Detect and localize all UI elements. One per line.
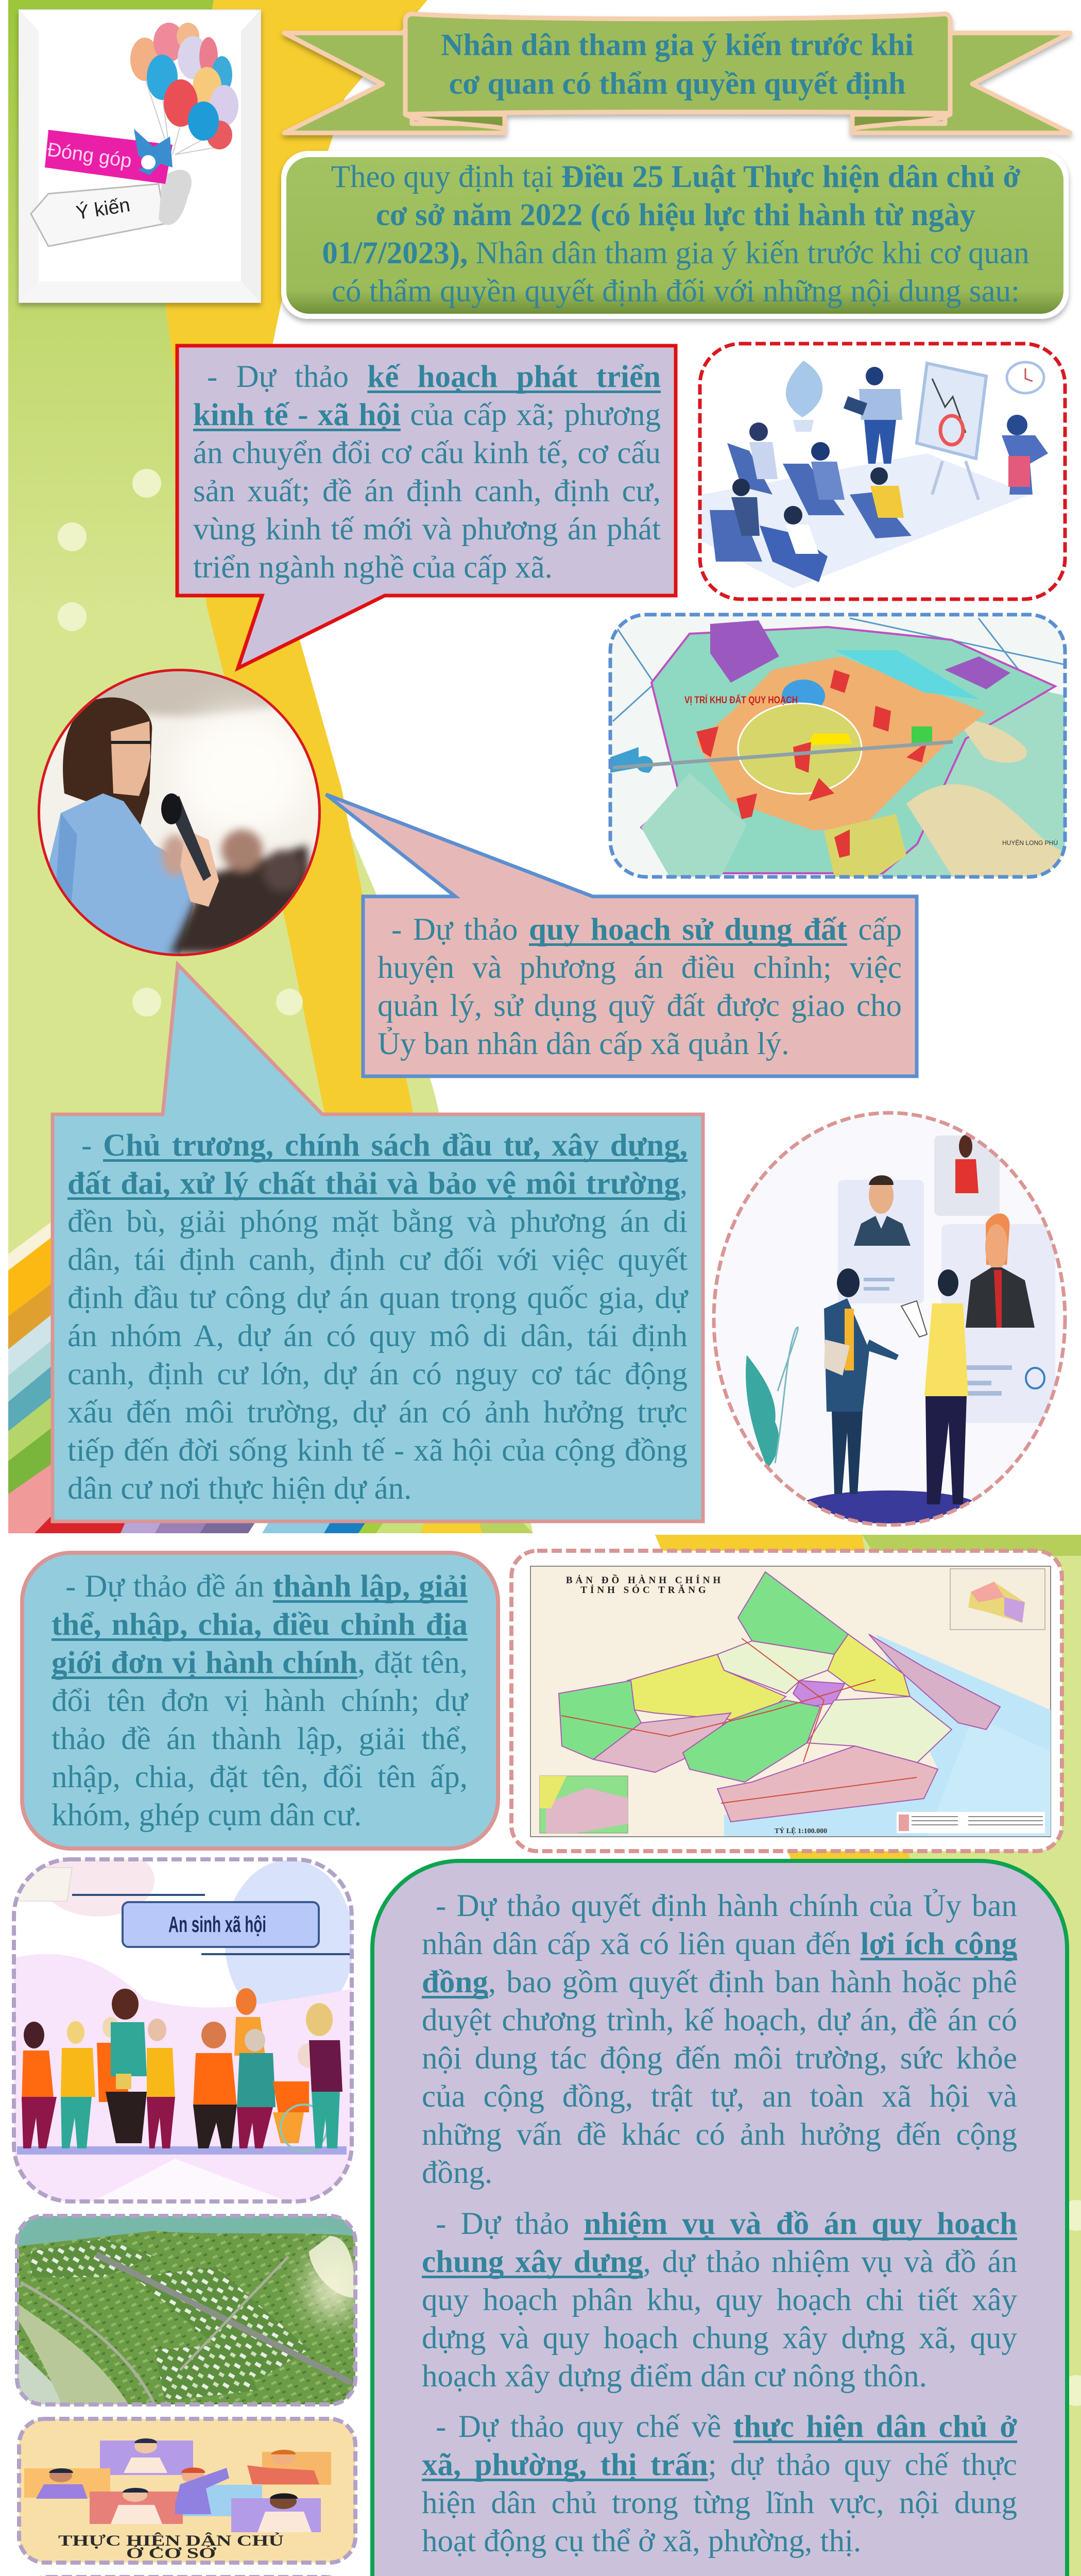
text: investment policy item: án nhóm A, dự án có quy mô di dân, tái định — [67, 1319, 688, 1353]
image: Soc Trang administrative map: TỶ LỆ 1:100.000 — [775, 1826, 827, 1835]
text: community decisions item: những vấn đề khác có ảnh hưởng đến cộng — [422, 2117, 1017, 2152]
image border: red dashed — [700, 344, 1065, 599]
text: economic plan item — [193, 360, 661, 585]
background: top section shapes — [0, 0, 533, 1535]
title text: Nhân dân tham gia ý kiến trước khi — [441, 28, 914, 62]
text: administrative unit item: khóm, ghép cụm dân cư. — [52, 1798, 362, 1833]
person: woman with folder — [824, 1268, 899, 1494]
map legend — [897, 1812, 1045, 1833]
poster title: THỰC HIỆN DÂN CHỦ — [58, 2532, 284, 2549]
title text — [441, 28, 914, 100]
image border: lavender dashed — [14, 1859, 352, 2201]
text: administrative unit item: - Dự thảo đề án thành lập, giải — [65, 1569, 468, 1604]
image: social security group illustration — [14, 1844, 354, 2201]
plant — [746, 1327, 798, 1468]
intro panel background — [281, 151, 1069, 319]
text: construction planning item: quy hoạch phân khu, quy hoạch chi tiết xây — [422, 2283, 1017, 2317]
intro text: cơ sở năm 2022 (có hiệu lực thi hành từ ngày — [376, 198, 975, 232]
profile card: man — [838, 1175, 924, 1303]
text: community decisions item: - Dự thảo quyết định hành chính của Ủy ban — [436, 1889, 1017, 1923]
poster title: Ở CƠ SỞ — [126, 2546, 217, 2562]
icon: potted plant — [786, 361, 822, 432]
text: community decisions item: duyệt chương trình, kế hoạch, dự án, đề án có — [422, 2003, 1017, 2038]
text: administrative unit item: thảo đề án thành lập, giải thể, — [52, 1722, 468, 1756]
icon: white scroll with label — [31, 170, 192, 246]
image: town planning map: HUYỆN LONG PHÚ — [1002, 839, 1058, 846]
image: Soc Trang administrative map — [511, 1551, 1062, 1851]
text: administrative unit item: giới đơn vị hành chính, đặt tên, — [52, 1646, 468, 1680]
text: administrative unit item — [52, 1569, 469, 1833]
title text: cơ quan có thẩm quyền quyết định — [449, 66, 905, 100]
poster title — [58, 2532, 284, 2562]
image: town planning map: VỊ TRÍ KHU ĐẤT QUY HOẠCH — [684, 694, 798, 706]
panel: pink speech bubble — [326, 794, 917, 1076]
text: construction planning item — [422, 2205, 1017, 2396]
text: community decisions item — [422, 1887, 1017, 2192]
profile card: man in suit — [941, 1213, 1055, 1423]
label box: An sinh xã hội — [168, 1912, 266, 1937]
text: democracy regulation item — [422, 2408, 1017, 2561]
text: investment policy item: canh, định cư lớn, dự án có nguy cơ tác động — [67, 1357, 688, 1392]
text: democracy regulation item: xã, phường, thị trấn; dự thảo quy chế thực — [422, 2448, 1017, 2482]
text: construction planning item: chung xây dựng, dự thảo nhiệm vụ và đồ án — [422, 2245, 1017, 2279]
text: land use item: quản lý, sử dụng quỹ đất được giao cho — [378, 989, 902, 1023]
person: presenting woman — [1002, 415, 1048, 495]
map title: BẢN ĐỒ HÀNH CHÍNH — [566, 1574, 724, 1586]
image: town planning map — [610, 615, 1065, 877]
image border: blue dashed — [610, 615, 1065, 877]
image border: lavender dashed — [17, 2216, 355, 2404]
panel: balloon card — [19, 10, 261, 302]
text: investment policy item: - Chủ trương, chính sách đầu tư, xây dựng, — [81, 1128, 688, 1163]
text: economic plan item: kinh tế - xã hội của cấp xã; phương — [193, 398, 661, 432]
text: community decisions item: nội dung tác động đến môi trường, sức khỏe — [422, 2041, 1017, 2076]
image: woman speaking at microphone — [40, 665, 318, 954]
text: investment policy item: định đầu tư công dự án quan trọng quốc gia, dự — [67, 1281, 688, 1315]
text: economic plan item: vùng kinh tế mới và phương án phát — [193, 512, 661, 547]
image: team meeting illustration — [701, 361, 1048, 588]
text: administrative unit item: đổi tên đơn vị hành chính; dự — [52, 1684, 468, 1718]
text: investment policy item: dân, tái định canh, định cư đối với việc quyết — [67, 1243, 688, 1277]
panel: red speech bubble — [177, 346, 676, 668]
provinces — [559, 1572, 1000, 1822]
intro text: có thẩm quyền quyết định đối với những nội dung sau: — [332, 274, 1020, 309]
text: construction planning item: hoạch xây dựng điểm dân cư nông thôn. — [422, 2359, 927, 2394]
text: land use item: - Dự thảo quy hoạch sử dụng đất cấp — [391, 912, 902, 947]
image border: rose dashed ellipse — [714, 1113, 1065, 1525]
person: man in yellow shirt — [901, 1269, 968, 1504]
text: democracy regulation item: - Dự thảo quy chế về thực hiện dân chủ ở — [436, 2410, 1017, 2444]
icon: white scroll with label: Ý kiến — [75, 194, 132, 224]
text: investment policy item: xấu đến môi trường, dự án có ảnh hưởng trực — [67, 1395, 688, 1430]
text: land use item: huyện và phương án điều chỉnh; việc — [378, 951, 902, 985]
icon: pink ribbon with label: Đóng góp — [46, 139, 133, 172]
text: community decisions item: nhân dân cấp xã có liên quan đến lợi ích cộng — [422, 1927, 1017, 1961]
icon: presentation board — [917, 363, 986, 500]
image: grassroots democracy illustration — [19, 2419, 355, 2563]
text: economic plan item: - Dự thảo kế hoạch phát triển — [207, 360, 661, 394]
ribbon banner — [284, 14, 1070, 134]
intro text — [322, 160, 1029, 309]
text: economic plan item: án chuyển đổi cơ cấu kinh tế, cơ cấu — [193, 436, 661, 470]
text: economic plan item: sản xuất; đề án định canh, định cư, — [193, 474, 661, 509]
image border: rose dashed — [511, 1551, 1062, 1851]
text: land use item: Ủy ban nhân dân cấp xã quản lý. — [378, 1027, 790, 1061]
image: business people illustration — [714, 1113, 1065, 1525]
text: construction planning item: - Dự thảo nhiệm vụ và đồ án quy hoạch — [436, 2207, 1017, 2241]
label box — [123, 1902, 319, 1947]
intro text: 01/7/2023), Nhân dân tham gia ý kiến trước khi cơ quan — [322, 236, 1029, 270]
text: community decisions item: của cộng đồng, trật tự, an toàn xã hội và — [422, 2079, 1017, 2114]
text: community decisions item: đồng, bao gồm quyết định ban hành hoặc phê — [422, 1965, 1017, 1999]
people tiles — [36, 2438, 319, 2532]
icon: pink ribbon with label — [45, 129, 173, 184]
inset map top right — [950, 1569, 1045, 1630]
text: construction planning item: dựng và quy hoạch chung xây dựng xã, quy — [422, 2321, 1017, 2355]
panel: blue rounded box — [22, 1553, 498, 1849]
map title — [566, 1574, 724, 1596]
panel: blue speech bubble — [53, 964, 703, 1521]
text: land use item — [378, 912, 902, 1061]
text: investment policy item: đất đai, xử lý chất thải và bảo vệ môi trường, — [67, 1166, 688, 1201]
background: lower section shapes — [559, 1535, 1081, 2576]
text: community decisions item: đồng. — [422, 2156, 492, 2190]
text: administrative unit item: thể, nhập, chia, điều chỉnh địa — [52, 1607, 468, 1642]
person: seated audience — [710, 422, 912, 582]
panel: lavender rounded box with green border — [372, 1861, 1067, 2576]
text: investment policy item: tiếp đến đời sống kinh tế - xã hội của cộng đồng — [67, 1433, 688, 1468]
text: democracy regulation item: hiện dân chủ trong từng lĩnh vực, nội dung — [422, 2486, 1017, 2520]
text: economic plan item: triển ngành nghề của cấp xã. — [193, 550, 553, 585]
inset map bottom left — [540, 1776, 628, 1833]
people group — [22, 1988, 342, 2151]
intro text: Theo quy định tại Điều 25 Luật Thực hiện dân chủ ở — [331, 160, 1020, 194]
person: standing man — [844, 367, 902, 464]
text: investment policy item: đền bù, giải phóng mặt bằng và phương án di — [67, 1205, 688, 1239]
image border: lavender dashed — [19, 2419, 355, 2563]
image: aerial city planning view — [17, 2216, 355, 2404]
text: investment policy item — [67, 1128, 688, 1506]
icon: clock — [1007, 362, 1044, 393]
text: investment policy item: dân cư nơi thực hiện dự án. — [67, 1471, 411, 1506]
map title: TỈNH SÓC TRĂNG — [580, 1584, 709, 1596]
text: democracy regulation item: hoạt động cụ thể ở xã, phường, thị. — [422, 2524, 861, 2558]
icon: balloons — [130, 23, 238, 155]
text: administrative unit item: nhập, chia, đặt tên, đổi tên ấp, — [52, 1760, 468, 1794]
profile card: woman — [934, 1135, 1000, 1216]
